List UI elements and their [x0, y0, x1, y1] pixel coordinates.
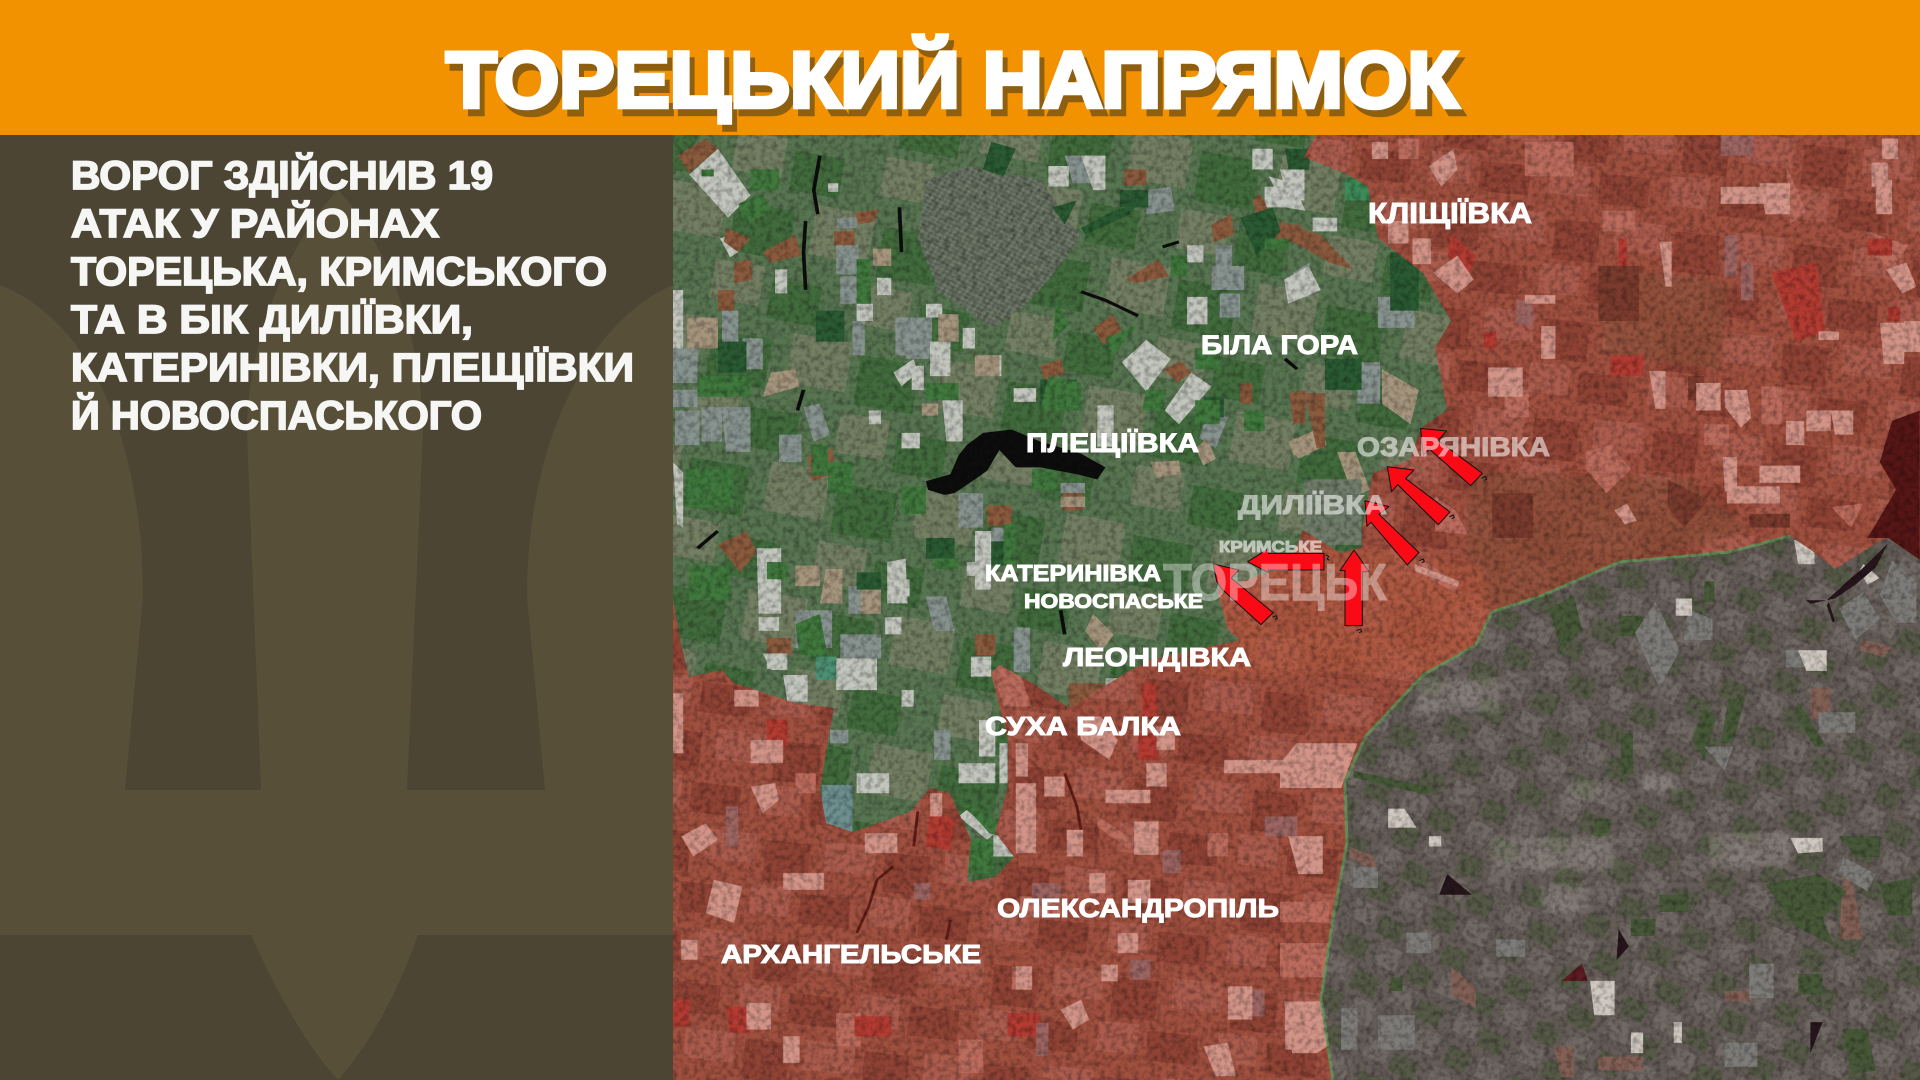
zone fields: rust tonal areas — [1198, 266, 1749, 675]
zone fields: light urban districts — [1419, 678, 1790, 912]
arrow: towards Novospaske — [1213, 564, 1277, 625]
map texture: grain — [673, 135, 1920, 1080]
zone fields: south-east grey patches — [1341, 540, 1916, 1077]
zone fields: pink blocks east of Toretsk road — [1280, 564, 1460, 1053]
arrow: towards Ozarianivka — [1421, 428, 1487, 486]
icon: trident watermark — [0, 190, 673, 1080]
arrow: towards north-west 2 — [1387, 467, 1454, 525]
label: Олександропіль: ОЛЕКСАНДРОПІЛЬ — [997, 893, 1279, 923]
label: Леонідівка: ЛЕОНІДІВКА — [1063, 642, 1251, 672]
panel: left text panel with trident watermark — [0, 135, 673, 1080]
body text: attack summary: АТАК У РАЙОНАХ — [71, 200, 439, 246]
label: Торецьк: ТОРЕЦЬК — [1163, 554, 1387, 612]
zone: occupied territory (red overlay) — [673, 135, 1920, 1080]
label: Диліївка: ДИЛІЇВКА — [1238, 490, 1387, 520]
body text: attack summary: ТОРЕЦЬКА, КРИМСЬКОГО — [71, 250, 607, 294]
label: Біла Гора: БІЛА ГОРА — [1201, 330, 1358, 360]
zone: south-east grey territory — [1321, 536, 1920, 1080]
map fields: eastern green wedge — [1280, 169, 1419, 545]
lake: Pleshchiivka reservoir — [926, 429, 1105, 495]
label: Кліщіївка: КЛІЩІЇВКА — [1368, 197, 1532, 230]
label: Суха Балка: СУХА БАЛКА — [985, 711, 1181, 741]
title: ТОРЕЦЬКИЙ НАПРЯМОК — [446, 34, 1459, 124]
title shadow: ТОРЕЦЬКИЙ НАПРЯМОК — [451, 41, 1464, 131]
body text: attack summary: КАТЕРИНІВКИ, ПЛЕЩІЇВКИ — [71, 346, 634, 390]
zone fields: red-zone patches — [673, 135, 1920, 1076]
arrow: towards Kryms'ke — [1248, 549, 1329, 573]
label: Плещіївка: ПЛЕЩІЇВКА — [1026, 428, 1199, 458]
arrow: towards Dyliivka — [1365, 501, 1424, 565]
zone fields: north-east red — [1372, 135, 1920, 593]
body text: attack summary — [71, 152, 634, 438]
body text: attack summary: ВОРОГ ЗДІЙСНИВ 19 — [71, 152, 493, 198]
map: satellite base with control zones — [673, 135, 1920, 1080]
label: Катеринівка: КАТЕРИНІВКА — [985, 560, 1161, 586]
zone fields: south-east grey — [1341, 540, 1916, 1077]
label: Новоспаське: НОВОСПАСЬКЕ — [1024, 591, 1203, 613]
arrow: north from Toretsk — [1340, 550, 1369, 633]
body text: attack summary: ТА В БІК ДИЛІЇВКИ, — [71, 298, 473, 342]
map base: green fields — [673, 135, 1890, 882]
map fields: southern green pocket — [763, 653, 1124, 873]
frontline: green border stroke — [1321, 536, 1790, 1080]
zone fields: south-west red — [673, 663, 1313, 1076]
body text: attack summary: Й НОВОСПАСЬКОГО — [71, 392, 482, 438]
map fields: north-west area — [673, 138, 1309, 672]
label: Архангельське: АРХАНГЕЛЬСЬКЕ — [721, 939, 981, 969]
map labels: settlements — [721, 197, 1550, 969]
title bar — [0, 0, 1920, 135]
label: Кримське: КРИМСЬКЕ — [1219, 539, 1322, 556]
label: Озарянівка: ОЗАРЯНІВКА — [1357, 432, 1550, 462]
arrows: six red attack arrows — [1213, 428, 1487, 633]
lake: reservoir under red overlay — [1868, 411, 1920, 562]
